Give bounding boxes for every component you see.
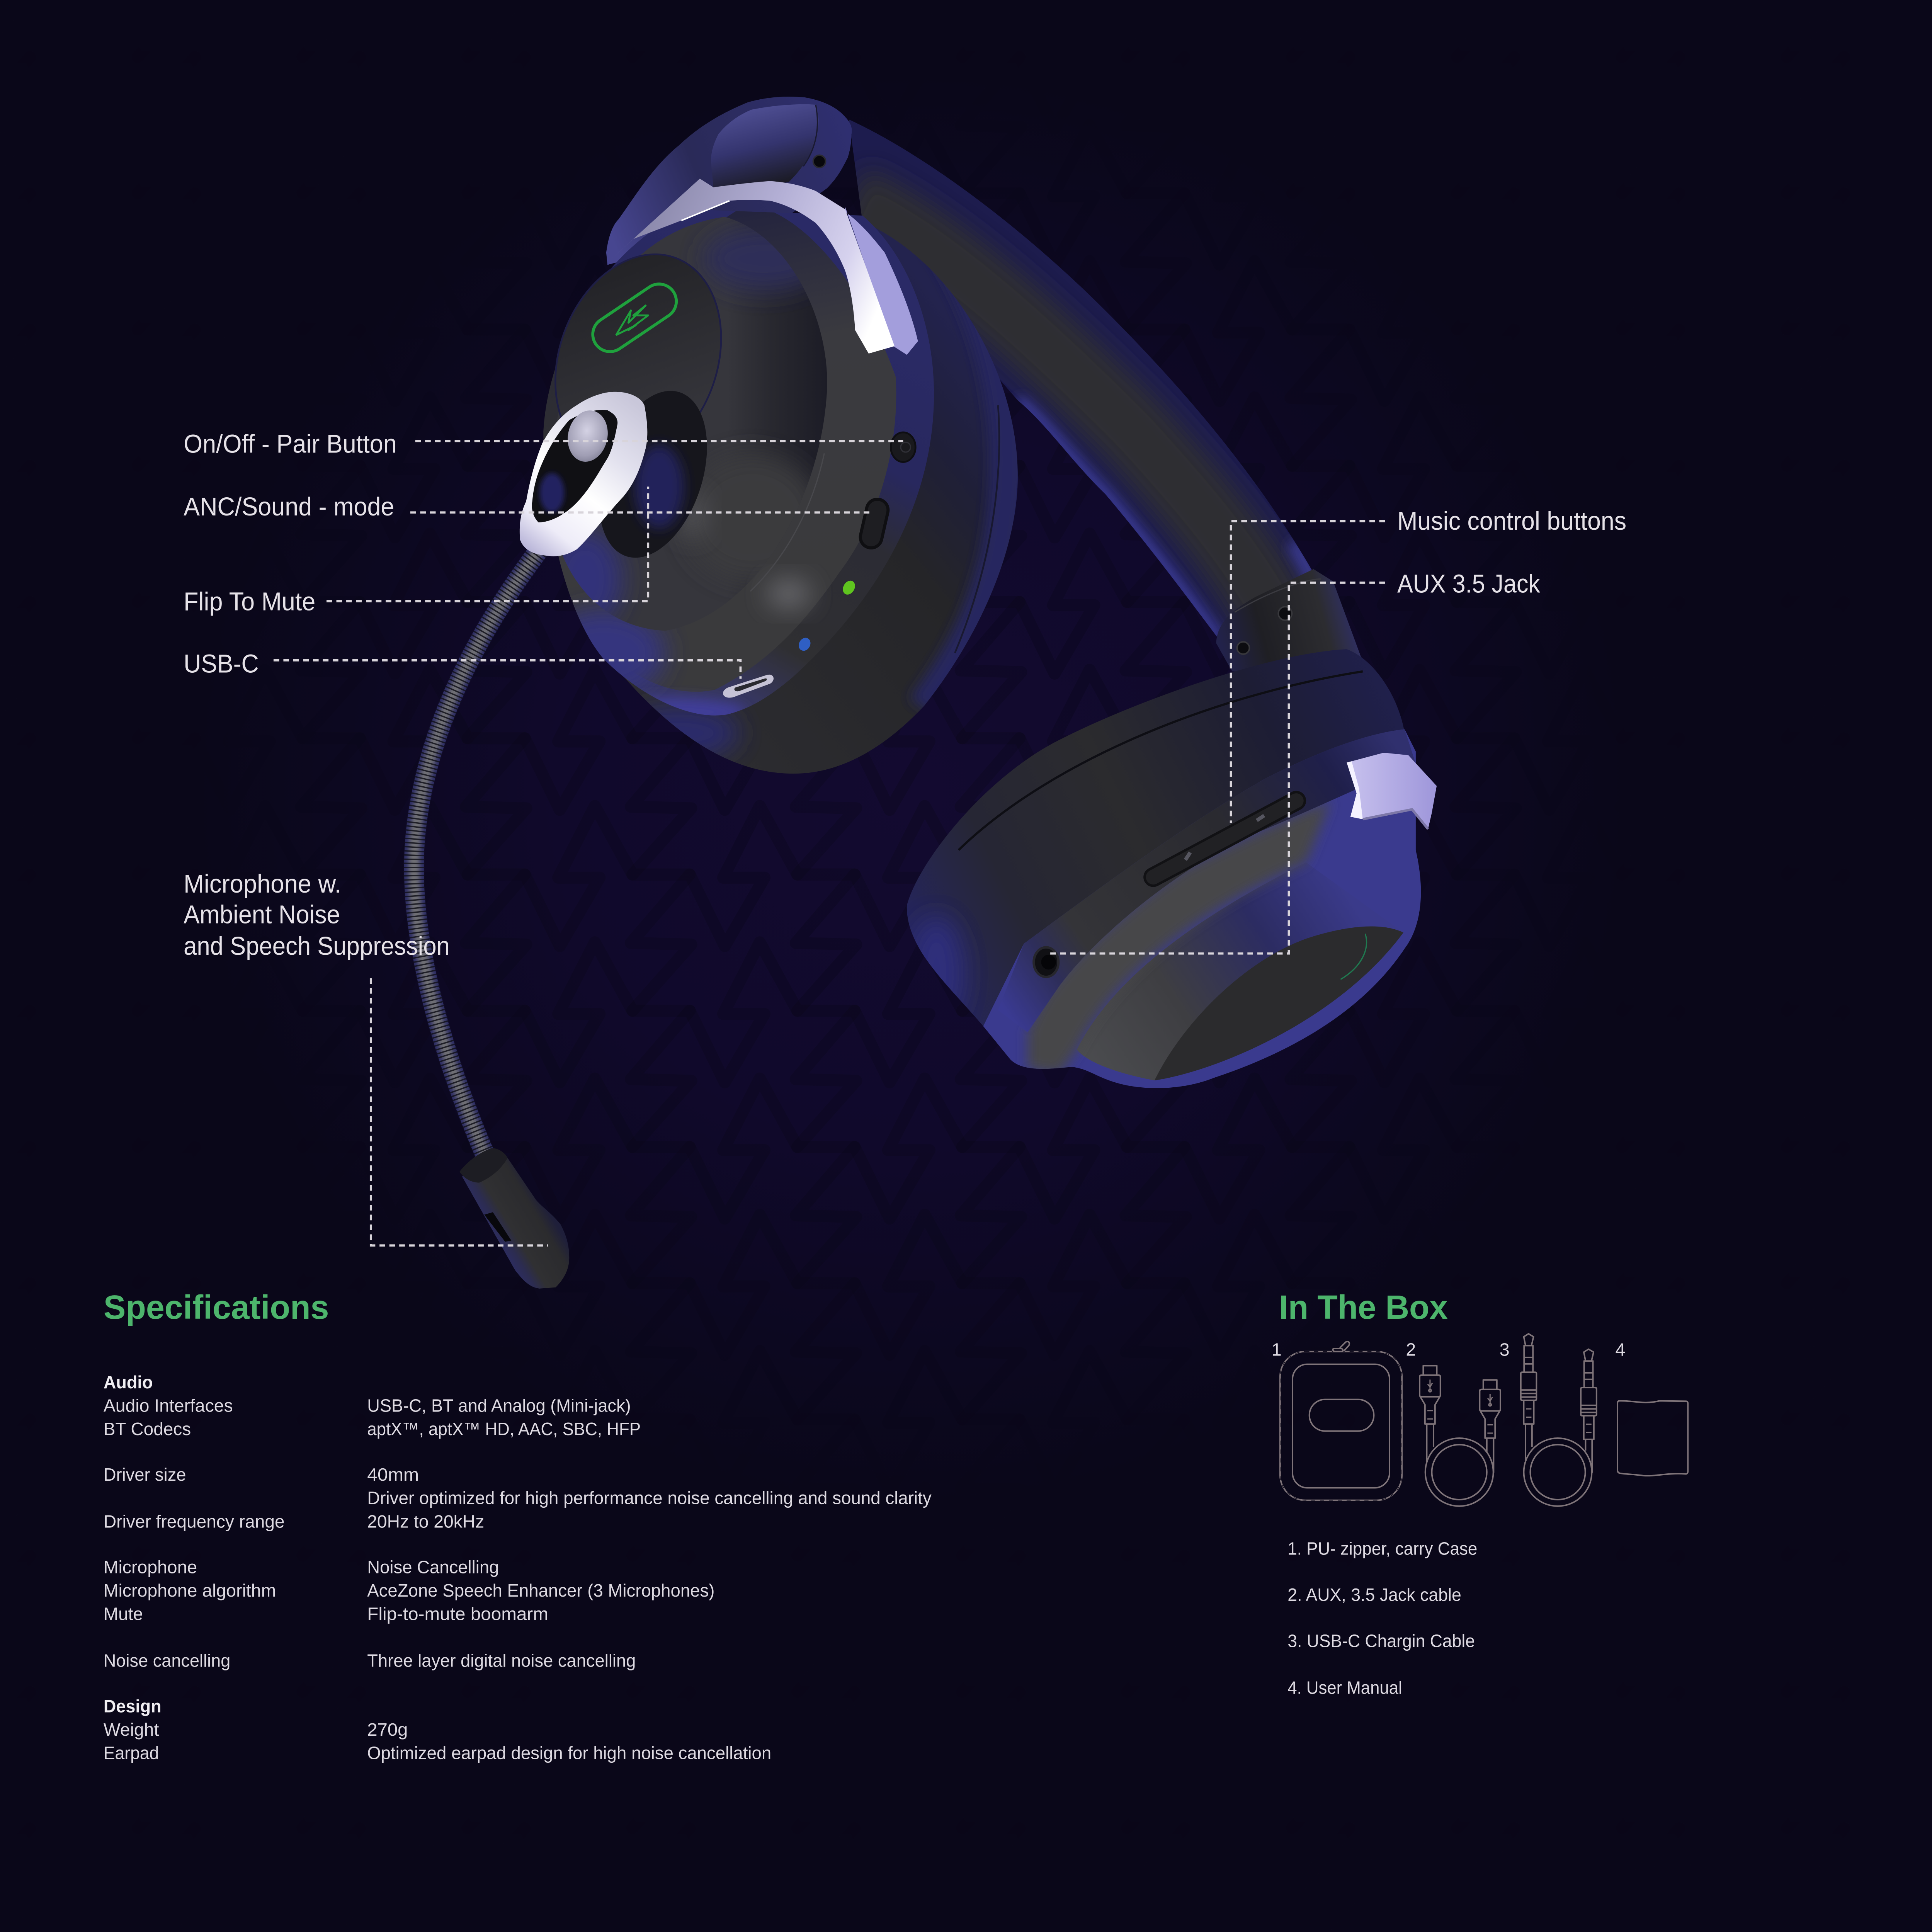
box item numbers: 3 xyxy=(1500,1340,1510,1360)
icon: carry case xyxy=(1280,1342,1402,1500)
box item numbers: 1 xyxy=(1272,1340,1282,1360)
specifications table: Earpad xyxy=(104,1743,159,1763)
heading: Specifications: Specifications xyxy=(104,1288,329,1326)
box contents icons xyxy=(1280,1334,1688,1506)
specifications table: Optimized earpad design for high noise cancellation xyxy=(367,1743,771,1763)
left cup body xyxy=(542,204,896,727)
specifications table: Driver optimized for high performance noise cancelling and sound clarity xyxy=(367,1488,932,1508)
headband xyxy=(849,119,1312,637)
box contents list: 2. AUX, 3.5 Jack cable xyxy=(1287,1585,1461,1605)
specifications table: USB-C, BT and Analog (Mini-jack) xyxy=(367,1396,631,1416)
specifications table xyxy=(104,1372,932,1763)
top hinge xyxy=(606,97,852,265)
box item numbers: 2 xyxy=(1406,1340,1416,1360)
callout: AUX: AUX 3.5 Jack xyxy=(1397,570,1540,599)
specifications table: Audio xyxy=(104,1372,153,1392)
callout: microphone xyxy=(184,869,450,961)
power button xyxy=(891,432,915,462)
specifications table: Noise Cancelling xyxy=(367,1557,499,1577)
callout: ANC: ANC/Sound - mode xyxy=(184,492,394,521)
mic chrome pivot xyxy=(520,392,647,556)
callout: microphone: Microphone w. xyxy=(184,869,341,898)
USB-C port xyxy=(723,675,774,698)
specifications table: Driver size xyxy=(104,1464,186,1485)
right ear pad xyxy=(907,649,1405,1030)
specifications table: 20Hz to 20kHz xyxy=(367,1511,484,1531)
box item numbers: 4 xyxy=(1615,1340,1625,1360)
specifications table: aptX™, aptX™ HD, AAC, SBC, HFP xyxy=(367,1419,641,1439)
specifications table: Mute xyxy=(104,1604,143,1624)
callout: microphone: Ambient Noise xyxy=(184,900,340,929)
LED indicators xyxy=(796,578,857,653)
mic tip xyxy=(459,1148,569,1289)
logo xyxy=(586,277,683,358)
callout: USB-C: USB-C xyxy=(184,650,259,679)
specifications table: Audio Interfaces xyxy=(104,1396,233,1416)
specifications table: Microphone xyxy=(104,1557,197,1577)
icon: AUX cable xyxy=(1420,1366,1500,1506)
specifications table: BT Codecs xyxy=(104,1419,191,1439)
callout: On/Off: On/Off - Pair Button xyxy=(184,430,397,459)
headset illustration xyxy=(414,97,1437,1289)
specifications table: Weight xyxy=(104,1719,159,1740)
logo disc xyxy=(527,231,750,488)
icon: user manual xyxy=(1617,1401,1688,1476)
specifications table: Flip-to-mute boomarm xyxy=(367,1604,548,1624)
AUX jack port xyxy=(1034,947,1058,977)
specifications table: 40mm xyxy=(367,1464,419,1485)
box item numbers xyxy=(1272,1340,1625,1360)
left cup shell xyxy=(542,204,934,727)
mic boom xyxy=(414,551,538,1164)
right ear cup xyxy=(907,649,1437,1088)
right shell xyxy=(983,729,1421,1088)
box contents list xyxy=(1287,1538,1477,1698)
music control buttons xyxy=(1153,801,1296,877)
heading: In The Box: In The Box xyxy=(1279,1288,1448,1326)
box contents list: 3. USB-C Chargin Cable xyxy=(1287,1631,1475,1651)
chrome headband arm xyxy=(607,179,918,355)
right chrome arm xyxy=(1347,753,1437,829)
mic pivot recess xyxy=(580,377,726,571)
callout: Flip to mute: Flip To Mute xyxy=(184,587,315,616)
callout leader lines xyxy=(274,441,1385,1245)
box contents list: 1. PU- zipper, carry Case xyxy=(1287,1538,1477,1558)
right outer disc xyxy=(1155,926,1403,1080)
cone xyxy=(548,217,827,631)
callout: music control: Music control buttons xyxy=(1397,507,1626,536)
specifications table: Microphone algorithm xyxy=(104,1580,276,1600)
specifications table: 270g xyxy=(367,1719,408,1740)
box contents list: 4. User Manual xyxy=(1287,1678,1402,1698)
specifications table: AceZone Speech Enhancer (3 Microphones) xyxy=(367,1580,714,1600)
icon: USB-C cable xyxy=(1521,1334,1597,1506)
specifications table: Three layer digital noise cancelling xyxy=(367,1651,636,1671)
left ear pad xyxy=(616,222,1018,774)
ANC slider button xyxy=(871,510,877,537)
yoke connector xyxy=(1216,569,1368,675)
specifications table: Design xyxy=(104,1696,162,1716)
specifications table: Driver frequency range xyxy=(104,1511,285,1531)
callout: microphone: and Speech Suppression xyxy=(184,932,450,961)
specifications table: Noise cancelling xyxy=(104,1651,230,1671)
